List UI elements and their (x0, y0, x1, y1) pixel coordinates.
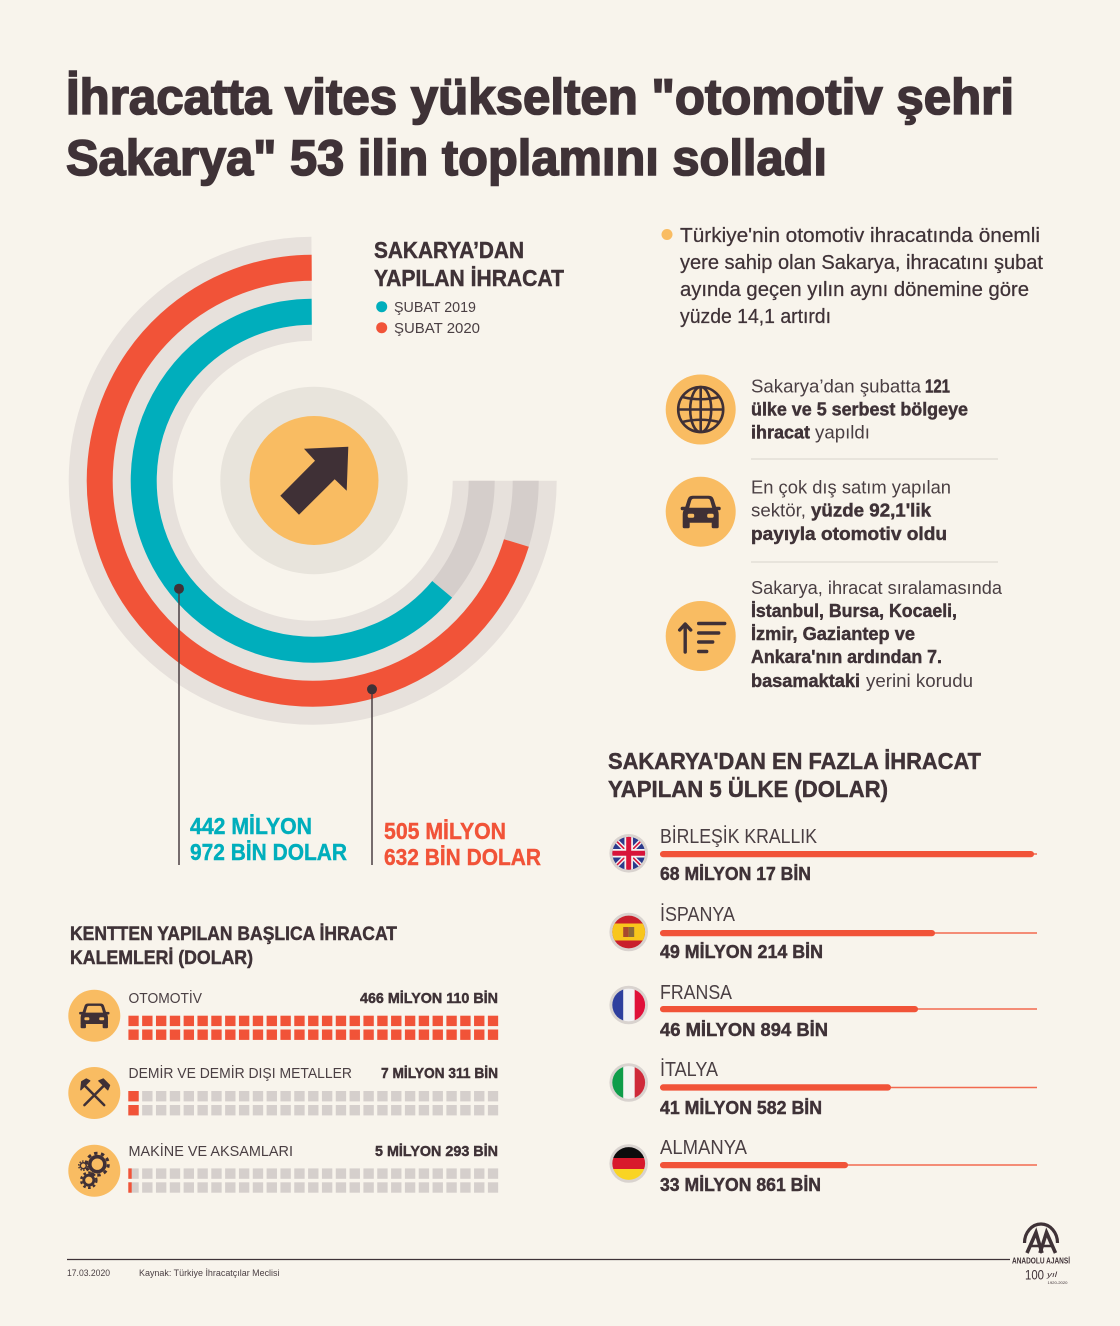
icon: globe (666, 374, 736, 444)
country: Spain: İSPANYA (660, 903, 736, 926)
country: Germany: ALMANYA (660, 1137, 748, 1159)
text: 121 countries: Sakarya’dan şubatta (751, 376, 922, 396)
intro paragraph (662, 225, 1043, 328)
country: United Kingdom: BİRLEŞİK KRALLIK (660, 825, 818, 848)
logo: Anadolu Ajansı: 1920-2020 (1048, 1280, 1068, 1285)
heading: export items: KENTTEN YAPILAN BAŞLICA İHRACAT (70, 924, 397, 945)
text: top sector (751, 476, 951, 544)
logo: Anadolu Ajansı (1012, 1224, 1070, 1285)
text: ranking: yerini korudu (866, 670, 973, 691)
item: machinery (68, 1142, 498, 1197)
flag: UK (609, 834, 648, 873)
intro paragraph: yere sahip olan Sakarya, ihracatını şubat (680, 252, 1043, 274)
text: top sector: yüzde 92,1'lik (811, 500, 932, 520)
chart heading (374, 237, 564, 291)
chart heading: SAKARYA’DAN (374, 237, 524, 263)
title: İhracatta vites yükselten "otomotiv şehri (66, 69, 1014, 125)
country: Germany (610, 1140, 1037, 1192)
country: France (610, 985, 1037, 1036)
title: Sakarya" 53 ilin toplamını solladı (66, 130, 827, 186)
intro paragraph: ayında geçen yılın aynı dönemine göre (680, 279, 1029, 301)
country: Italy: 41 MİLYON 582 BİN (660, 1097, 822, 1118)
leader line: 2019 (174, 584, 184, 865)
value: 2019 (190, 813, 347, 865)
item: metals (68, 1064, 498, 1119)
bar: Şubat 2020 (100, 268, 516, 694)
heading: top 5 countries: SAKARYA'DAN EN FAZLA İHRACAT (608, 748, 981, 774)
country: Italy (609, 1058, 1037, 1118)
value: 2020 (384, 818, 541, 870)
logo: Anadolu Ajansı: 100 (1025, 1266, 1044, 1282)
country: Spain (609, 903, 1037, 962)
value: 2019: 442 MİLYON (190, 813, 312, 839)
country: United Kingdom (609, 825, 1037, 884)
text: ranking: Sakarya, ihracat sıralamasında (751, 577, 1003, 598)
heading: export items (70, 924, 397, 969)
logo: Anadolu Ajansı: ANADOLU AJANSİ (1012, 1256, 1070, 1266)
flag: Spain (609, 913, 648, 951)
text: ranking: İzmir, Gaziantep ve (751, 623, 915, 644)
item: machinery: 5 MİLYON 293 BİN (375, 1143, 498, 1160)
country: France: 46 MİLYON 894 BİN (660, 1019, 828, 1040)
legend: ŞUBAT 2020 (394, 320, 480, 337)
icon: hammers (68, 1067, 120, 1119)
text: ranking: İstanbul, Bursa, Kocaeli, (751, 600, 957, 621)
item: automotive: 466 MİLYON 110 BİN (360, 990, 498, 1007)
country: Italy: İTALYA (660, 1058, 719, 1081)
icon: gears (68, 1145, 120, 1197)
legend (376, 299, 480, 337)
item: automotive (68, 989, 498, 1042)
track: gray band (121, 289, 505, 673)
bar: Şubat 2019 (144, 312, 442, 650)
heading: top 5 countries (608, 748, 981, 802)
text: top sector: sektör, (751, 500, 806, 520)
heading: export items: KALEMLERİ (DOLAR) (70, 948, 253, 969)
radial bar chart (100, 268, 526, 694)
footer: Kaynak: Türkiye İhracatçılar Meclisi (139, 1268, 280, 1278)
title (66, 69, 1014, 186)
text: 121 countries: ülke ve 5 serbest bölgeye (751, 398, 968, 420)
icon: ranking (666, 601, 736, 671)
track: unfilled portion (442, 481, 526, 589)
text: top sector: payıyla otomotiv oldu (751, 523, 947, 544)
chart heading: YAPILAN İHRACAT (374, 265, 564, 291)
text: 121 countries (751, 376, 968, 442)
text: 121 countries: yapıldı (815, 422, 870, 442)
text: 121 countries: 121 (925, 376, 950, 396)
footer (67, 1260, 1010, 1278)
item: automotive: OTOMOTİV (128, 989, 202, 1007)
country: France: FRANSA (660, 982, 733, 1004)
intro paragraph: Türkiye'nin otomotiv ihracatında önemli (680, 225, 1040, 247)
value: 2019: 972 BİN DOLAR (190, 839, 347, 865)
country: Spain: 49 MİLYON 214 BİN (660, 941, 823, 962)
footer: 17.03.2020 (67, 1268, 110, 1278)
intro paragraph: yüzde 14,1 artırdı (680, 306, 831, 328)
icon: car small (68, 990, 120, 1042)
flag: France (609, 986, 648, 1024)
flag: Italy (609, 1063, 648, 1102)
leader line: 2020 (367, 684, 377, 865)
legend: ŞUBAT 2019 (394, 299, 476, 316)
icon: car (666, 477, 736, 547)
text: 121 countries: ihracat (751, 422, 810, 442)
logo: Anadolu Ajansı: yıl (1046, 1272, 1058, 1279)
country: United Kingdom: 68 MİLYON 17 BİN (660, 863, 811, 884)
value: 2020: 505 MİLYON (384, 818, 506, 844)
heading: top 5 countries: YAPILAN 5 ÜLKE (DOLAR) (608, 776, 888, 802)
text: ranking: Ankara'nın ardından 7. (751, 646, 942, 667)
text: top sector: En çok dış satım yapılan (751, 476, 951, 498)
text: ranking (751, 577, 1003, 691)
item: machinery: MAKİNE VE AKSAMLARI (128, 1142, 293, 1160)
flag: Germany (609, 1144, 648, 1183)
country: Germany: 33 MİLYON 861 BİN (660, 1174, 821, 1195)
item: metals: 7 MİLYON 311 BİN (381, 1065, 498, 1082)
value: 2020: 632 BİN DOLAR (384, 844, 541, 870)
center icon: arrow (220, 387, 408, 574)
text: ranking: basamaktaki (751, 670, 860, 691)
item: metals: DEMİR VE DEMİR DIŞI METALLER (128, 1064, 352, 1082)
